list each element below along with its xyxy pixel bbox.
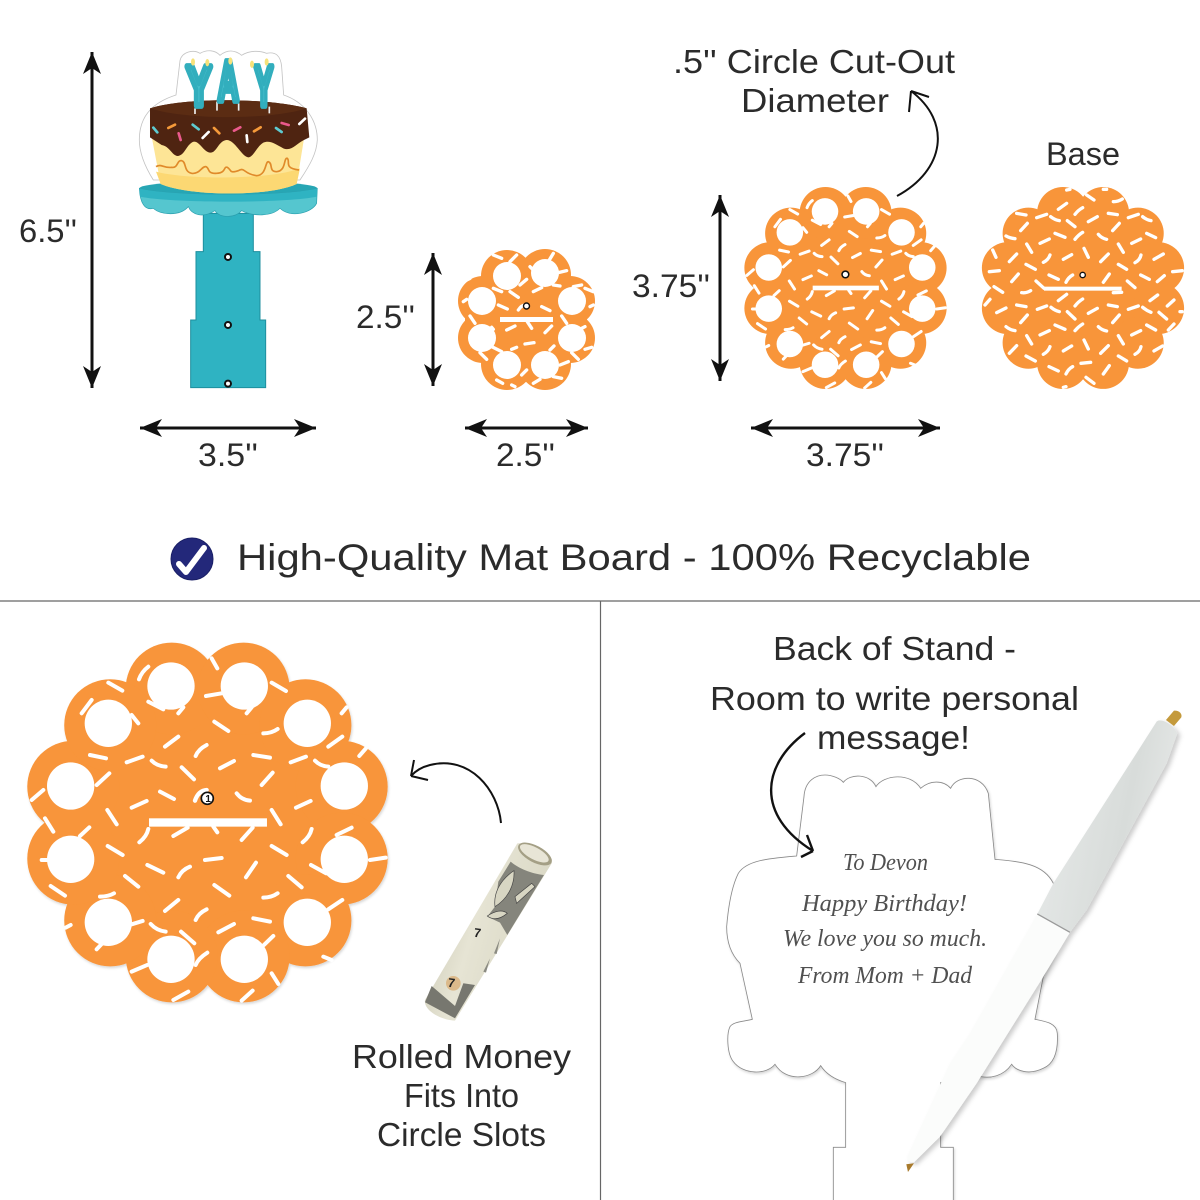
label: 3.5 inches: 3.5'' — [198, 437, 258, 473]
caption: rolled money: Circle Slots — [377, 1116, 546, 1153]
sprinkles — [153, 119, 305, 142]
pen — [906, 711, 1182, 1172]
label: 2.5 inches height: 2.5'' — [356, 299, 415, 335]
rolled dollar bill — [425, 838, 555, 1021]
dimension arrows and labels: tall cake stand — [19, 52, 316, 473]
handwritten message: To Devon — [843, 850, 928, 876]
rolled dollar bill: 7 — [473, 926, 482, 941]
handwritten message: Happy Birthday! — [801, 891, 967, 917]
callout text second line: Diameter — [741, 82, 889, 119]
material banner — [171, 537, 1031, 580]
plate — [139, 181, 317, 216]
arrow: width 2.5 inches — [465, 426, 588, 430]
stand back outline — [727, 775, 1058, 1200]
medium scalloped stand — [744, 187, 947, 389]
heading: back of stand: Room to write personal — [710, 680, 1079, 717]
curved arrow to slot — [411, 760, 501, 823]
label: 6.5 inches: 6.5'' — [19, 213, 77, 249]
caption: rolled money — [352, 1038, 572, 1153]
banner text: High-Quality Mat Board - 100% Recyclable — [237, 537, 1031, 578]
medium circle stand with dimensions — [632, 187, 947, 473]
heading: back of stand: Back of Stand - — [773, 630, 1016, 667]
panel: back of stand — [710, 630, 1182, 1200]
curved arrow to circle — [897, 91, 938, 196]
large scalloped stand — [27, 643, 388, 1002]
label: 3.75 inches width: 3.75'' — [806, 437, 884, 473]
cake body — [152, 137, 304, 193]
stem markers — [225, 254, 231, 387]
caption: rolled money: Rolled Money — [352, 1038, 572, 1075]
rolled dollar bill: 7 — [447, 976, 456, 991]
candle sticks — [195, 102, 269, 114]
heading: back of stand — [710, 630, 1079, 756]
small circle stand with dimensions — [356, 249, 595, 473]
base piece with label — [982, 136, 1184, 389]
curved arrow to stand — [771, 733, 813, 857]
panel dividers — [0, 601, 1200, 1200]
chocolate icing — [150, 100, 309, 157]
arrow: width 3.75 inches — [751, 426, 940, 430]
panel: rolled money — [27, 643, 572, 1153]
handwritten message — [783, 850, 987, 989]
YAY candle letters — [186, 49, 273, 119]
handwritten message: From Mom + Dad — [797, 963, 973, 989]
large scalloped stand: 1 — [205, 794, 211, 805]
label: 3.75 inches height: 3.75'' — [632, 268, 710, 304]
arrow: width 3.5 inches — [140, 426, 316, 430]
cake stand topper — [139, 49, 317, 388]
arrow: height 6.5 inches — [90, 52, 94, 388]
handwritten message: We love you so much. — [783, 926, 987, 952]
arrow: height 2.5 inches — [432, 253, 434, 386]
label: base: Base — [1046, 136, 1120, 172]
heading: back of stand: message! — [817, 719, 970, 756]
stem — [191, 213, 266, 388]
callout text: .5'' Circle Cut-Out — [673, 43, 955, 80]
YAY candle letters: Y — [186, 55, 212, 119]
candle flames — [191, 57, 269, 68]
caption: rolled money: Fits Into — [404, 1077, 519, 1114]
icon: check mark badge — [171, 538, 213, 580]
callout: circle cut-out diameter — [673, 43, 955, 196]
arrow: height 3.75 inches — [718, 195, 722, 381]
small scalloped stand — [458, 249, 595, 390]
label: 2.5 inches width: 2.5'' — [496, 437, 555, 473]
base scalloped piece — [982, 187, 1184, 389]
YAY candle letters: Y — [254, 55, 273, 118]
sticker border — [139, 51, 317, 180]
YAY candle letters: A — [218, 49, 239, 113]
